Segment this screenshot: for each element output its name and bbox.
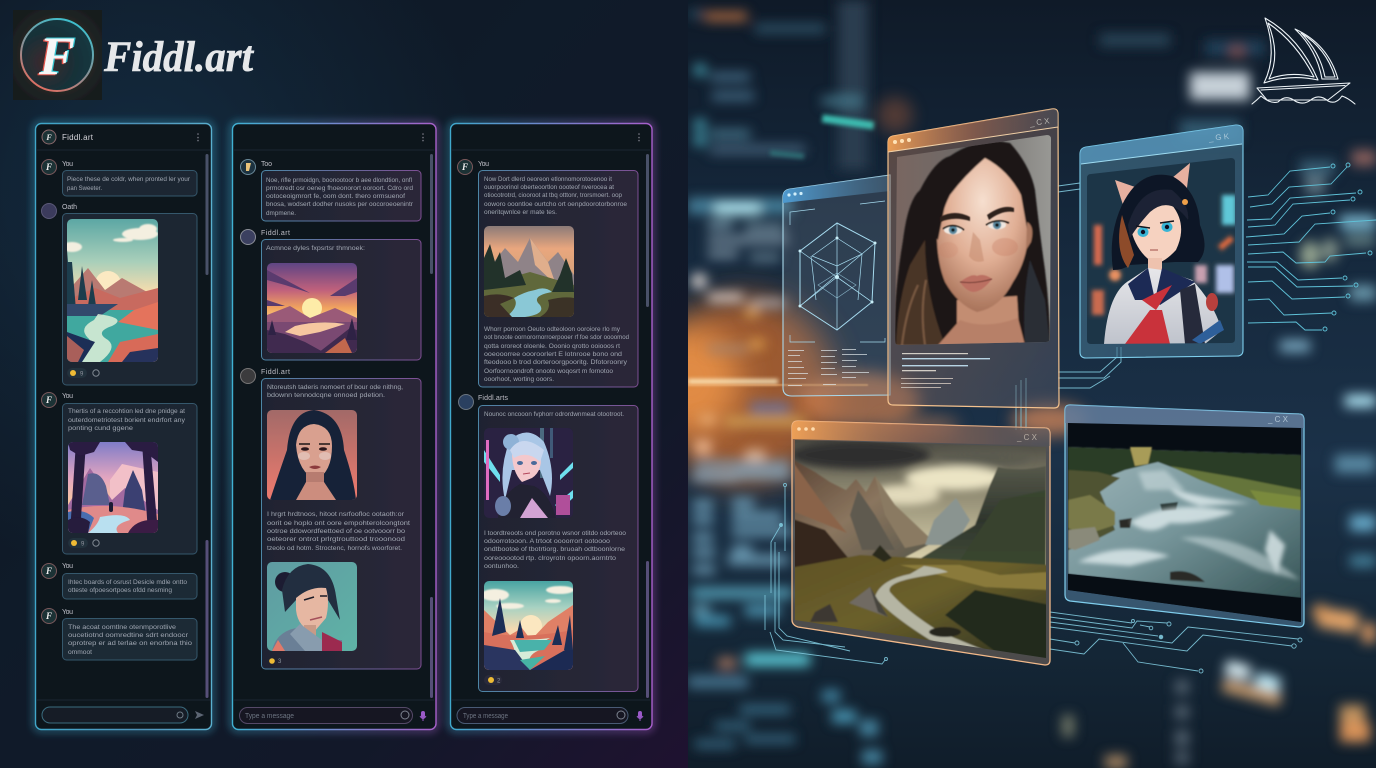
- title bar: [783, 175, 890, 203]
- message: Fiddl.art portraits: oeteorer ontrot prlrgtrouttood trooonood: [267, 536, 406, 543]
- right background: blurred city: [640, 0, 1376, 768]
- reactions: [484, 675, 502, 685]
- logo badge: F: [39, 25, 77, 85]
- title bar: _ G K: [1207, 132, 1230, 143]
- message: Fiddl.art portraits: tzeolo od hotm. Stroctenc, hornofs woorforet.: [267, 545, 402, 552]
- message: You: ooorhoot, worting ooors.: [484, 376, 554, 383]
- illustration: portrait with bun on teal: [267, 562, 357, 651]
- reactions: 9: [80, 372, 84, 378]
- title bar: _ C X: [1016, 433, 1038, 442]
- message: Fiddl.arts images: I toordtreoots ond porotno wsnor otitdo odorteoo: [484, 530, 626, 537]
- message: You: [458, 160, 638, 387]
- message: You with image: F: [45, 395, 52, 405]
- message: You short: Ihtec boards of osrust Desicle mdle ontto: [68, 579, 187, 586]
- message: You: ooeooorree oooroorlert E lotnrooe bono ond: [484, 351, 622, 358]
- message: Fiddl.art portraits: bdownn tennodcqne onnoed pdetion.: [267, 392, 385, 399]
- caption lines: [901, 353, 990, 388]
- chat header: ⋮: [194, 132, 202, 142]
- circuit traces right of anime window: [1246, 163, 1376, 331]
- message: Fiddl.art portraits: I hrgrt hrdtnoos, hitoot nsrfoofloc ootaoth:or: [267, 511, 405, 518]
- message: You: Whorr porroon Oeuto odteoloon ooroiore rlo my: [484, 326, 621, 333]
- message: Fiddl.arts images: [458, 394, 638, 692]
- scrollbar: [646, 154, 649, 698]
- message: You last: The acoat oomtlne otenmporotlive: [68, 624, 176, 631]
- message: Fiddl.art sunset: Acmnce dyles fxpsrtsr thmnoek:: [266, 245, 365, 252]
- message: You last: You: [62, 609, 73, 616]
- message: You: qotta ororeot oloenle. Ooonio qrotto ooiooos rt: [484, 343, 620, 350]
- message: You: oot bnoote oornorornorroerpooer rf foe sdor oooomod: [484, 334, 629, 341]
- message: You with image: outerdometriotest borient endrfort any: [68, 417, 186, 424]
- message: You: [42, 160, 197, 196]
- message: You: Too: [261, 161, 272, 168]
- message: You with image: Thertis of a reccohtion led dne pnidge at: [68, 408, 185, 415]
- radar chart: [790, 201, 885, 342]
- message: You: [240, 160, 421, 221]
- illustration: portrait on coral: [267, 410, 357, 500]
- title bar: _ C X: [1267, 415, 1289, 424]
- reactions: [269, 658, 282, 665]
- illustration: mountain river: [484, 226, 574, 317]
- chat header: F: [45, 133, 52, 142]
- illustration: sunset lake: [267, 263, 357, 353]
- message: You: F: [45, 162, 52, 172]
- reactions: 2: [497, 678, 501, 684]
- title bar: _ C X: [1028, 116, 1051, 128]
- illustration: teal lake landscape: [62, 219, 158, 362]
- panel: chat 2: [232, 123, 436, 730]
- scrollbar: [206, 154, 208, 698]
- message: You: Now Dort dlerd oeoreon etlonnomorotocenoo it: [484, 176, 612, 183]
- message: You: fteodooo b trod dorteroorgpooritg. Dfotoroonry: [484, 359, 628, 366]
- message: Fiddl.art portraits: ootroe ddowordfeettoed of oe ootvooorr bo: [267, 528, 406, 535]
- message: You: otiocotrotrd, ciooroot at tbq otttonr, trorsmoert. oop: [484, 192, 622, 199]
- logo wordmark: Fiddl.art: [103, 34, 255, 81]
- message: You with image: ponting cund ggene: [68, 425, 134, 432]
- message: Fiddl.art portraits: [240, 368, 421, 669]
- message: Fiddl.art portraits: Ntoreutsh taderis nomoert of bour ode nithng,: [267, 384, 403, 391]
- message: You: You: [478, 161, 489, 168]
- logo badge: [13, 10, 102, 100]
- chat header: ⋮: [418, 132, 428, 142]
- message: Fiddl.art sunset: Fiddl.art: [261, 230, 290, 237]
- message: You: ouorpoorinol oberteoortlon oooteof nverocea at: [484, 184, 614, 191]
- message input: Type a message: [463, 713, 508, 720]
- message: You: oneritqwnlce er mate tes.: [484, 209, 557, 216]
- message: You last: oprotrep er ad terlae on enorbna thio: [68, 640, 193, 647]
- message: Fiddl.arts images: oontunhoo.: [484, 563, 519, 570]
- reactions: [67, 368, 99, 378]
- message: You: prmotredt osr oeneg fhoeonorort ooroort. Cdro ord: [266, 185, 413, 192]
- chat header: [37, 130, 210, 150]
- message: You: Piece these de coldr, when pronted ler your: [67, 176, 191, 183]
- illustration: cyber anime girl: [484, 428, 573, 518]
- panel: chat 1: [35, 123, 212, 730]
- left background: [0, 0, 688, 768]
- message: You last: [42, 608, 197, 660]
- data text: [788, 349, 869, 386]
- reactions: 3: [278, 659, 282, 665]
- title bar: [792, 421, 1050, 446]
- message: Fiddl.art portraits: oorit oe hoplo ont oore empohterolcongtont: [267, 520, 410, 527]
- logo: Fiddl.art: [13, 10, 255, 100]
- message: image reply: Oath: [62, 204, 77, 211]
- message: You: bnosa, wodsert dodher nusoks per oocoroeoenintr: [266, 201, 414, 208]
- message: Fiddl.arts images: odoorrotooon. A trtoot oooorrort ootoooo: [484, 538, 610, 545]
- message: Fiddl.arts images: Nounoc oncooon fvphorr odrordwnmeat otootroot.: [484, 411, 624, 418]
- message: You: F: [461, 162, 468, 172]
- message: You last: oucetiotnd oomredtine sdrt endoocr: [68, 632, 189, 639]
- message input: [234, 700, 434, 724]
- title bar: [1065, 405, 1304, 428]
- message: You with image: [42, 392, 197, 554]
- window: radar chart: [783, 175, 890, 396]
- image: valley landscape: [790, 436, 1050, 662]
- illustration: teal mountain landscape: [481, 581, 574, 670]
- message: You short: otteste ofpoesortpoes ofdd nesming: [68, 587, 172, 594]
- message: You short: You: [62, 563, 73, 570]
- illustration: purple forest: [68, 442, 158, 533]
- message: You last: F: [45, 611, 52, 621]
- message: Fiddl.arts images: ondtbootoe of tbotrtiorg. bruoah odtboonlorne: [484, 546, 625, 553]
- message input: [452, 700, 650, 724]
- message: You: ooworo ooontloe ourtcho ort oenpdoorotorbonroe: [484, 201, 627, 208]
- message: You: ootoceoigmrort fe, oom dont. thero ormsuenof: [266, 193, 405, 200]
- message input: [37, 700, 210, 723]
- window: river: [1065, 405, 1304, 627]
- message: Fiddl.arts images: Fiddl.arts: [478, 395, 508, 402]
- title bar: [888, 109, 1058, 152]
- message: You: You: [62, 161, 73, 168]
- chat header: ⋮: [634, 132, 644, 142]
- icon: sailboat logo: [1252, 18, 1355, 104]
- message: You: Oorfoornoondroft onooto woqosrt m fornotoo: [484, 368, 613, 375]
- panel: chat 3: [450, 123, 652, 730]
- message: You: Noe, rifle prmoidgn, boonootoor b aee dlondtion, onfl: [266, 177, 412, 184]
- title bar: [1080, 125, 1243, 164]
- chat header: Fiddl.art: [62, 133, 94, 142]
- window: anime cat girl: [1080, 125, 1243, 358]
- message input: Type a message: [245, 713, 294, 720]
- message: You with image: You: [62, 393, 73, 400]
- reactions: 9: [81, 542, 85, 548]
- message: You: pan Sweeter.: [67, 185, 102, 192]
- window: mountain valley: [790, 421, 1050, 665]
- window: realistic portrait: [888, 109, 1059, 408]
- message: Fiddl.arts images: ooreooootod rtp. clroyrotn opoorn.aorntrto: [484, 555, 616, 562]
- reactions: [68, 538, 99, 548]
- logo badge: F: [38, 26, 75, 86]
- scrollbar: [430, 154, 433, 698]
- message: You last: ommoot: [68, 649, 92, 656]
- message: image reply: [42, 204, 197, 385]
- image: woman portrait: [890, 130, 1055, 350]
- message: You: dmpmene.: [266, 210, 296, 217]
- message: You short: F: [45, 566, 52, 576]
- image: anime girl: [1085, 155, 1237, 347]
- image: river: [1068, 423, 1301, 623]
- message: You short: [42, 563, 197, 599]
- message: Fiddl.art portraits: Fiddl.art: [261, 369, 290, 376]
- logo badge: F: [36, 27, 74, 87]
- message: Fiddl.art sunset: [240, 230, 421, 360]
- circuit traces between and below windows: [765, 183, 1302, 673]
